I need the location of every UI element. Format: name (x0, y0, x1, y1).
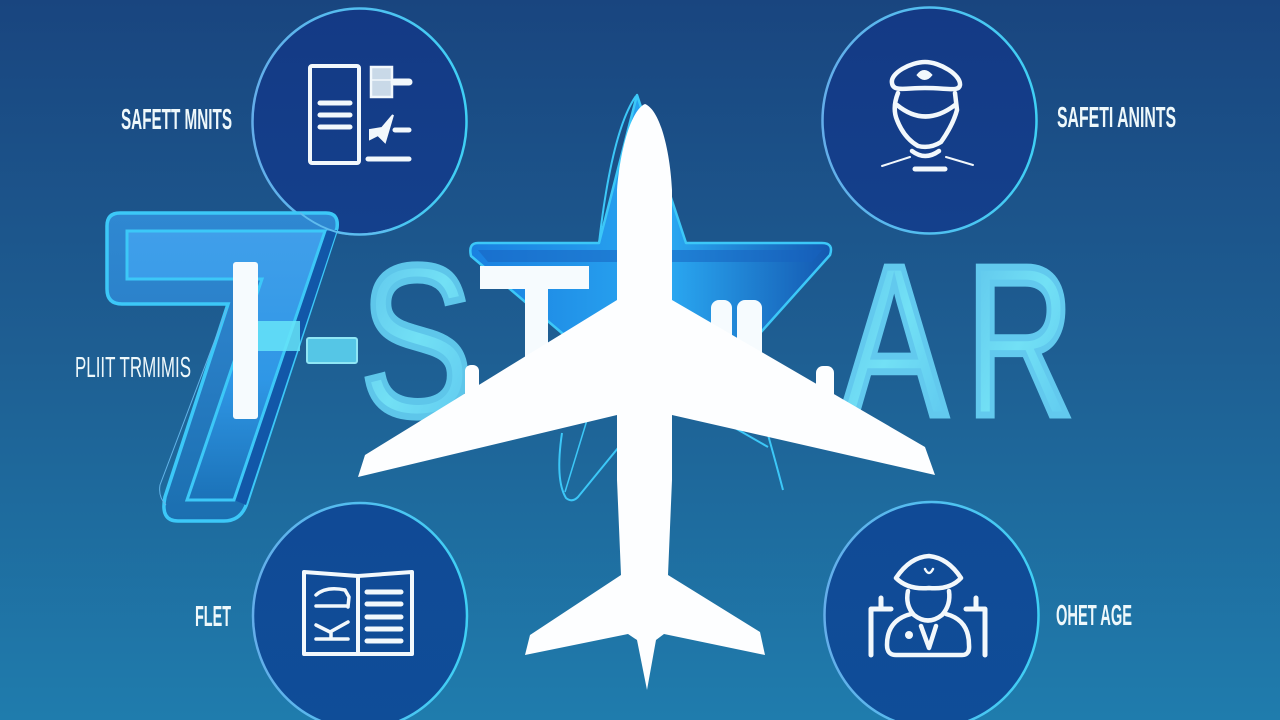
infographic canvas: FLET (195, 601, 231, 633)
panel: bottom-left circle with book icon (253, 503, 467, 720)
title letters L stubs (711, 300, 762, 390)
label: safety audits left: SAFETT MNITS (121, 104, 232, 136)
title letter T (480, 266, 589, 376)
numeral 7 outline (107, 180, 455, 521)
icon: open book (304, 572, 412, 654)
panel: top-right circle with pilot icon (822, 8, 1036, 234)
title hyphen (258, 321, 357, 363)
icon: pilot head (882, 62, 973, 169)
star behind plane (470, 95, 831, 500)
airplane silhouette (358, 104, 935, 690)
panel: bottom-right circle with officer icon (824, 502, 1038, 720)
label: pilot training: PLIIT TRMIMIS (75, 352, 191, 384)
title letter R: R (966, 220, 1074, 461)
title letter A: A (841, 220, 947, 461)
outer engines (465, 365, 834, 418)
label: safety audits right: SAFETI ANINTS (1057, 102, 1176, 134)
icon: checklist and plane (310, 66, 409, 163)
label: fleet age: OHET AGE (1056, 600, 1132, 632)
panel: top-left circle with document icon (252, 8, 466, 234)
title letter S: S (360, 220, 473, 461)
title letter I (233, 262, 258, 419)
icon: officer with towers (871, 556, 985, 655)
